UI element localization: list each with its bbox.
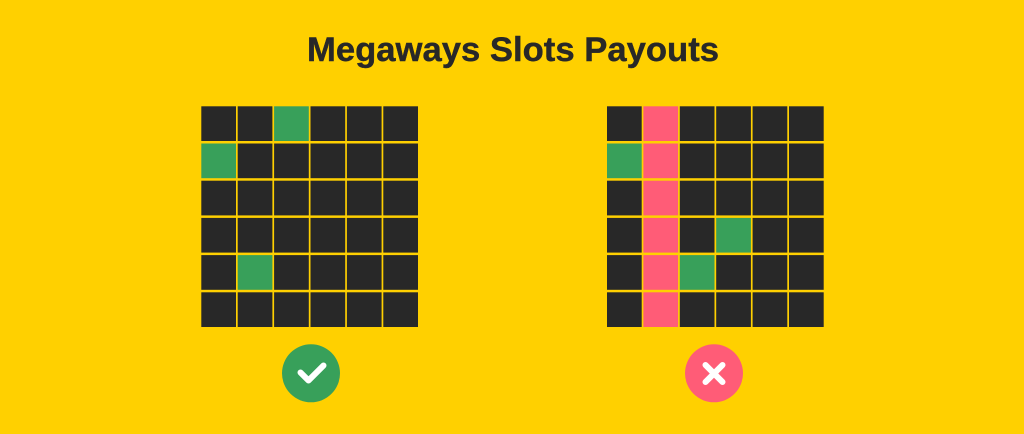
title: Megaways Slots Payouts	[307, 31, 719, 69]
panel: winning slot grid	[201, 106, 418, 327]
panel: losing slot grid with highlighted reel	[607, 106, 824, 327]
icon: red cross	[685, 344, 743, 402]
icon: green check mark	[282, 344, 340, 402]
